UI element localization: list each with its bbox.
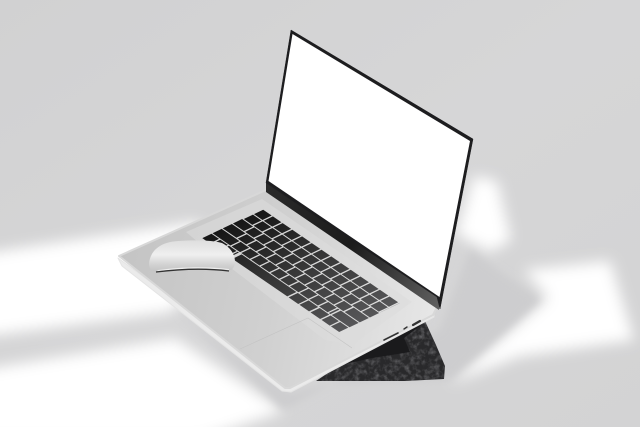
window light patches — [0, 176, 634, 427]
hinge — [266, 183, 440, 310]
base deck — [119, 190, 437, 388]
keyboard — [207, 211, 395, 330]
shadow beneath laptop — [178, 250, 540, 410]
white screen — [268, 34, 470, 297]
screen bezel — [266, 30, 473, 309]
speaker and trackpad zones — [186, 199, 412, 349]
base edge — [118, 258, 434, 392]
mouse — [149, 240, 235, 272]
ports — [384, 321, 420, 340]
stone — [316, 321, 445, 381]
laptop — [118, 30, 473, 392]
